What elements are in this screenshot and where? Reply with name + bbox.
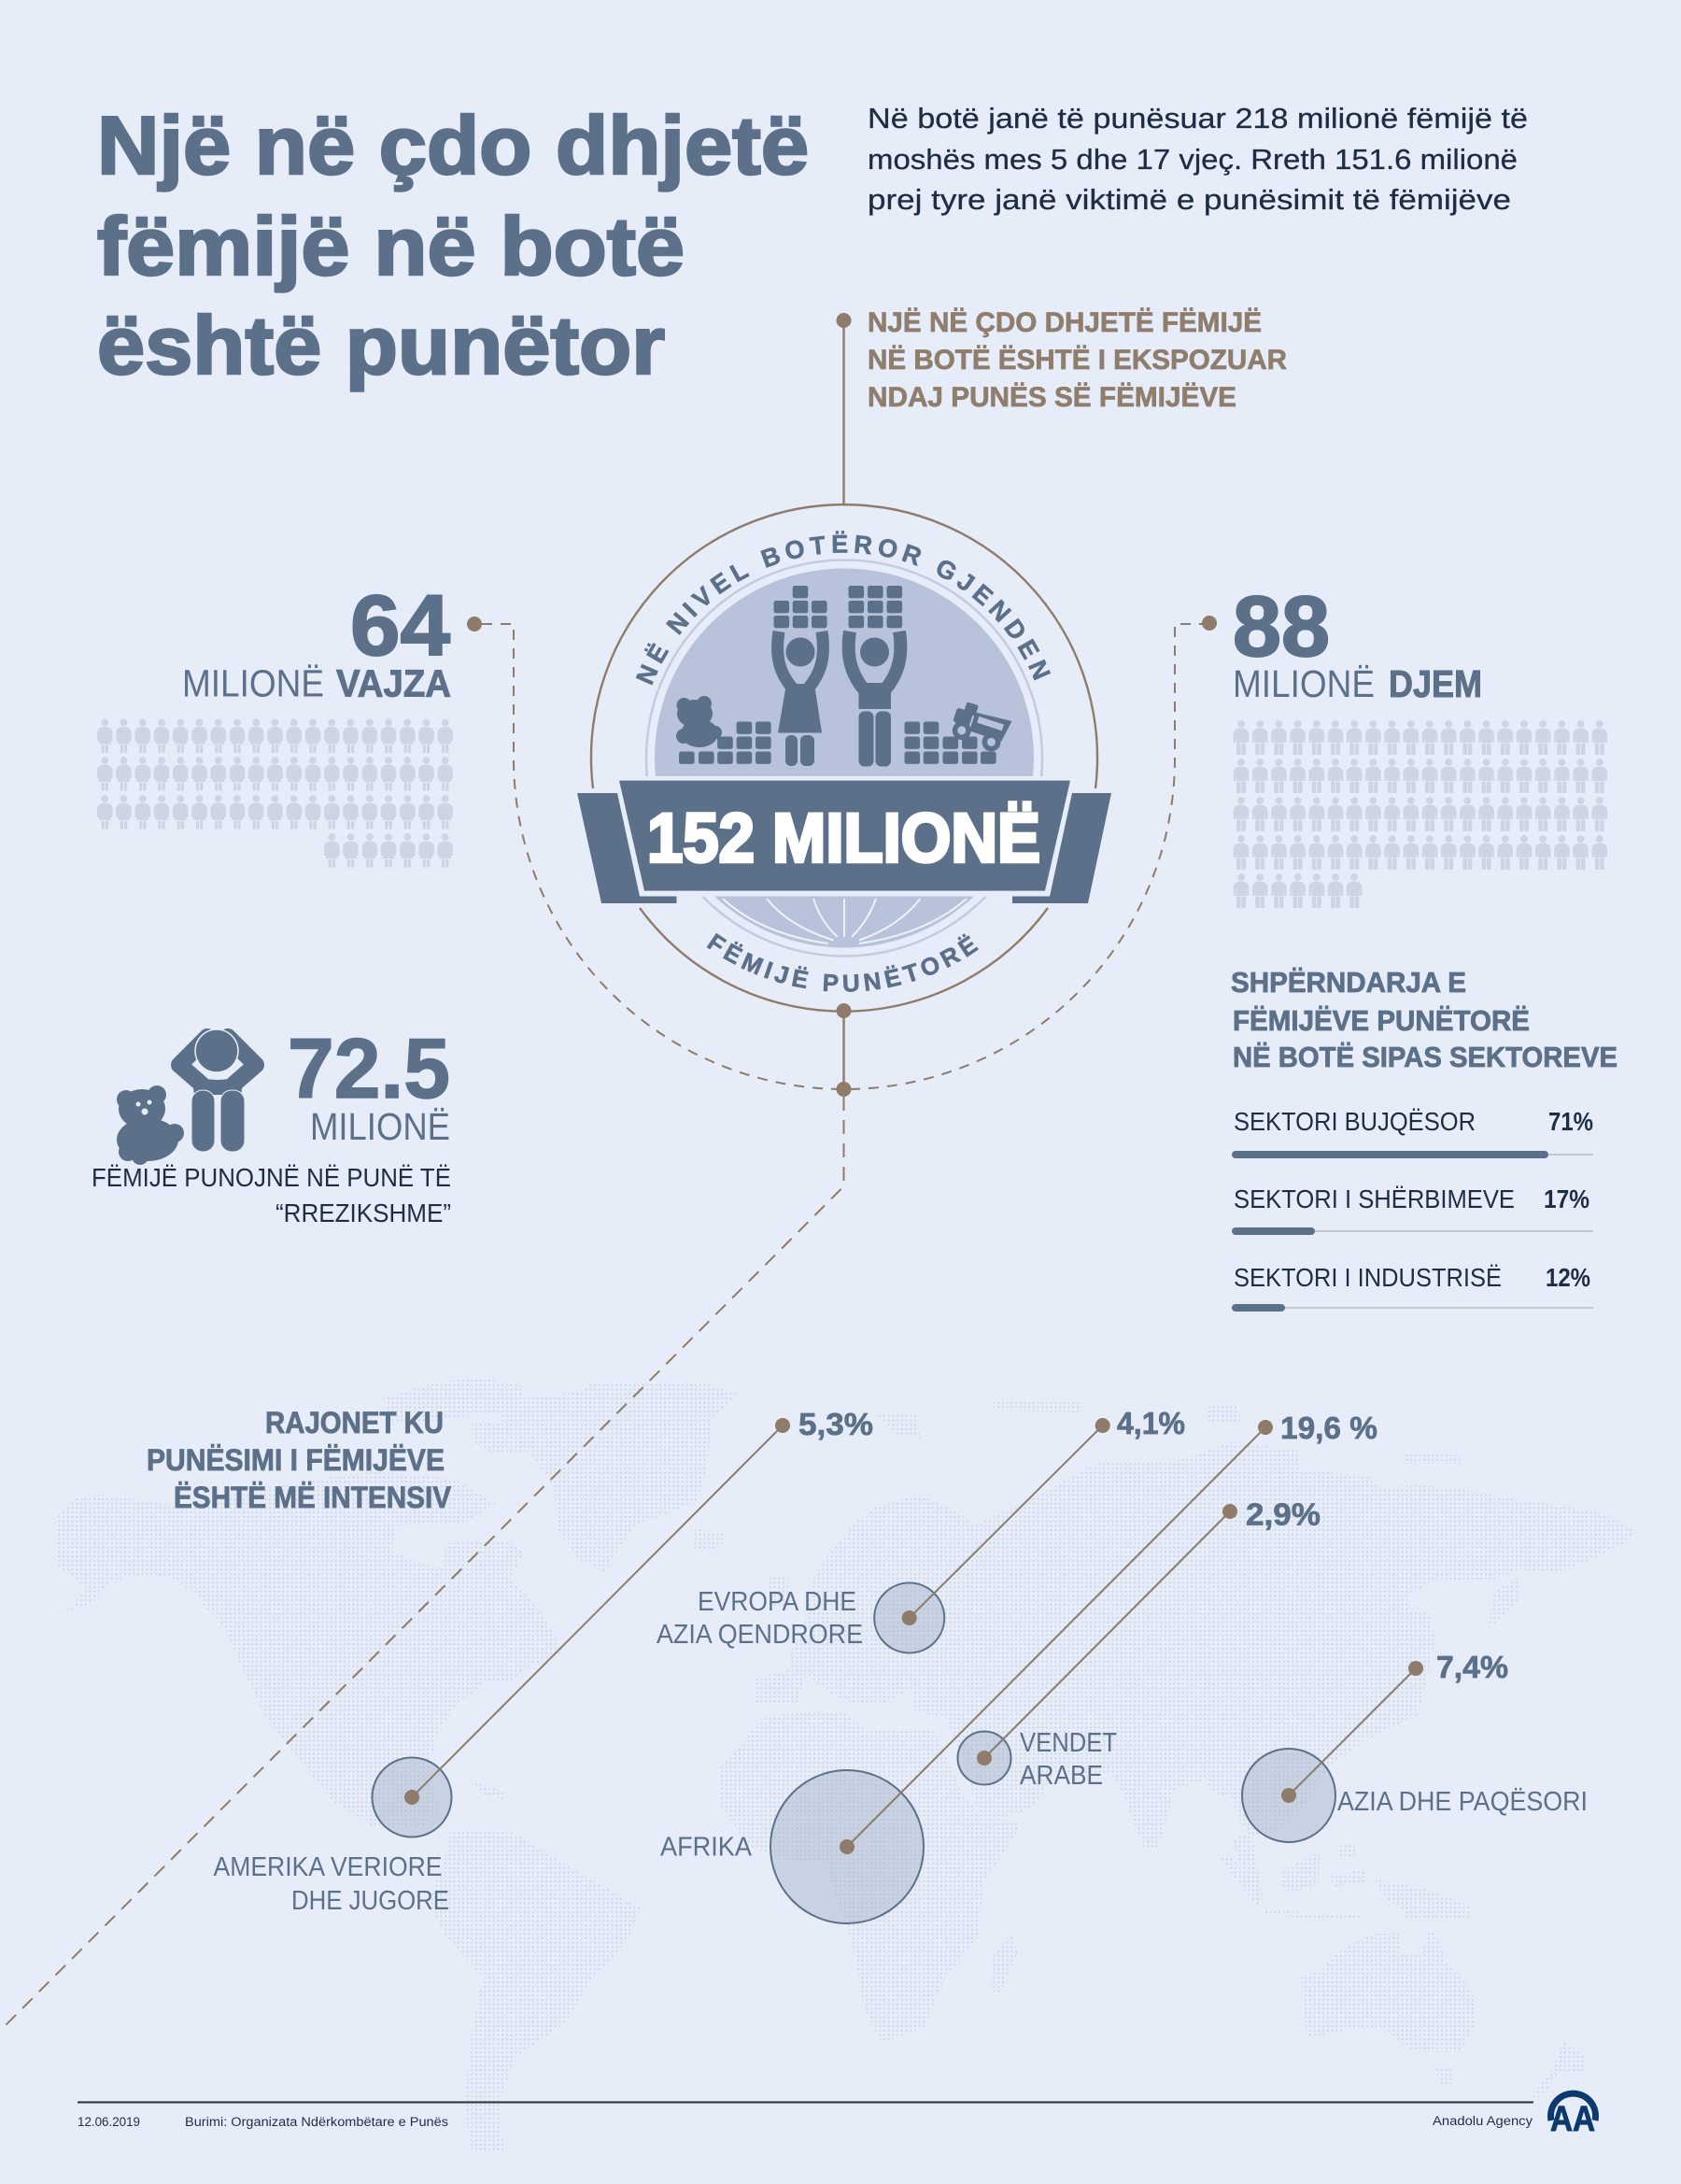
map heading: PUNËSIMI I FËMIJËVE: [147, 1443, 445, 1477]
subheading: one in ten: NDAJ PUNËS SË FËMIJËVE: [868, 382, 1236, 413]
title: fëmijë në botë: [97, 200, 685, 292]
icon: toy truck: [948, 700, 1013, 755]
callout: Americas: DHE JUGORE: [291, 1886, 449, 1916]
sector distribution heading: [1231, 966, 1617, 1073]
arc text top: NË NIVEL BOTËROR GJENDEN: [635, 531, 1052, 686]
stat: 64 million girls: 64: [350, 578, 450, 674]
icon: girl carrying boxes: [778, 631, 823, 766]
footer: date and source: 12.06.2019: [78, 2115, 140, 2129]
footer rule: [78, 2102, 1533, 2104]
intro text: [868, 102, 1528, 216]
bar: services: 17%: [1544, 1184, 1589, 1213]
icon: teddy bear: [676, 696, 722, 747]
title: Një në çdo dhjetë: [97, 99, 809, 191]
subheading: one in ten: NJË NË ÇDO DHJETË FËMIJË: [868, 307, 1262, 338]
dotted world map: [37, 1373, 1653, 2158]
callout: Asia and Pacific: [1242, 1650, 1588, 1842]
pictogram: girls: [97, 719, 453, 868]
stat: 64 million girls: [182, 578, 451, 704]
bar: services: SEKTORI I SHËRBIMEVE: [1234, 1184, 1515, 1213]
callout: Americas: [213, 1407, 873, 1916]
connector: subheading to emblem: [837, 313, 852, 505]
bar: services: [1232, 1184, 1593, 1235]
callout: Asia and Pacific: 7,4%: [1436, 1650, 1508, 1684]
icon: teddy bear: [117, 1085, 184, 1165]
map heading: ËSHTË MË INTENSIV: [174, 1481, 452, 1514]
stat: 72.5 million: FËMIJË PUNOJNË NË PUNË TË: [92, 1163, 451, 1192]
disc: [646, 560, 1042, 957]
emblem: 152 million: [577, 503, 1111, 1013]
sector distribution heading: NË BOTË SIPAS SEKTOREVE: [1233, 1041, 1617, 1073]
ribbon tails: [577, 793, 1111, 903]
callout: Europe and Central Asia: EVROPA DHE: [698, 1587, 856, 1617]
callout: Africa: 19,6 %: [1280, 1411, 1377, 1445]
footer: date and source: Anadolu Agency: [1433, 2114, 1533, 2128]
callout: Arab states: [958, 1496, 1321, 1791]
callout: Arab states: 2,9%: [1246, 1496, 1321, 1532]
callout: Americas: AMERIKA VERIORE: [213, 1852, 443, 1882]
intro text: Në botë janë të punësuar 218 milionë fëmijë të: [868, 102, 1528, 135]
stat: 64 million girls: MILIONË: [182, 661, 324, 704]
callout: Africa: AFRIKA: [660, 1833, 753, 1863]
callout: Asia and Pacific: AZIA DHE PAQËSORI: [1337, 1787, 1588, 1817]
bar chart: sectors: [1232, 1107, 1593, 1312]
stat: 72.5 million: 72.5: [288, 1022, 450, 1116]
title: [97, 99, 809, 391]
ribbon: [619, 781, 1070, 891]
sector distribution heading: FËMIJËVE PUNËTORË: [1233, 1004, 1530, 1037]
subheading: one in ten: NË BOTË ËSHTË I EKSPOZUAR: [868, 345, 1287, 376]
bar: industry: 12%: [1546, 1263, 1590, 1292]
stat: 72.5 million: [92, 1022, 451, 1227]
footer: date and source: [78, 2114, 1533, 2129]
stat: 88 million boys: DJEM: [1389, 662, 1482, 705]
logo: Anadolu Agency: AA: [1550, 2100, 1595, 2139]
map heading: [147, 1406, 452, 1514]
bar: agriculture: [1232, 1107, 1593, 1158]
stat: 88 million boys: [1233, 579, 1482, 705]
callout: Europe and Central Asia: 4,1%: [1117, 1406, 1185, 1440]
subheading: one in ten: [868, 307, 1287, 413]
stat: 64 million girls: VAJZA: [336, 661, 451, 704]
callout: Africa: [660, 1411, 1377, 1923]
stat: 72.5 million: “RREZIKSHME”: [275, 1198, 451, 1227]
stat: 88 million boys: MILIONË: [1233, 662, 1375, 705]
callout: Arab states: VENDET: [1020, 1728, 1117, 1758]
footer: date and source: Burimi: Organizata Ndërkombëtare e Punës: [185, 2115, 448, 2129]
title: është punëtor: [97, 299, 665, 391]
sector distribution heading: SHPËRNDARJA E: [1231, 966, 1466, 999]
dashed connector: to map: [0, 1097, 844, 2031]
stat: 88 million boys: 88: [1233, 579, 1330, 674]
arc text bottom: FËMIJË PUNËTORË: [706, 932, 979, 992]
intro text: moshës mes 5 dhe 17 vjeç. Rreth 151.6 milionë: [868, 143, 1518, 176]
stacked boxes: [679, 586, 996, 764]
callout: Europe and Central Asia: [657, 1406, 1185, 1653]
callout: Arab states: ARABE: [1020, 1761, 1103, 1791]
connector dots: [467, 616, 1217, 1097]
map heading: RAJONET KU: [265, 1406, 444, 1439]
intro text: prej tyre janë viktimë e punësimit të fëmijëve: [868, 183, 1511, 216]
bar: industry: SEKTORI I INDUSTRISË: [1234, 1263, 1502, 1292]
ribbon label: 152 MILIONË: [647, 800, 1040, 876]
bar: industry: [1232, 1263, 1593, 1312]
bar: agriculture: SEKTORI BUJQËSOR: [1234, 1107, 1476, 1136]
stat: 72.5 million: MILIONË: [310, 1105, 450, 1148]
outer ring: [591, 504, 1097, 1012]
callout: Americas: 5,3%: [798, 1407, 873, 1441]
callout: Europe and Central Asia: AZIA QENDRORE: [657, 1620, 863, 1650]
icon: sitting child with head in hands: [179, 1029, 256, 1152]
bar: agriculture: 71%: [1548, 1107, 1593, 1136]
pictogram: boys: [1234, 720, 1607, 908]
icon: boy carrying boxes: [849, 631, 900, 766]
dashed connector: girls and boys: [482, 624, 1205, 1089]
